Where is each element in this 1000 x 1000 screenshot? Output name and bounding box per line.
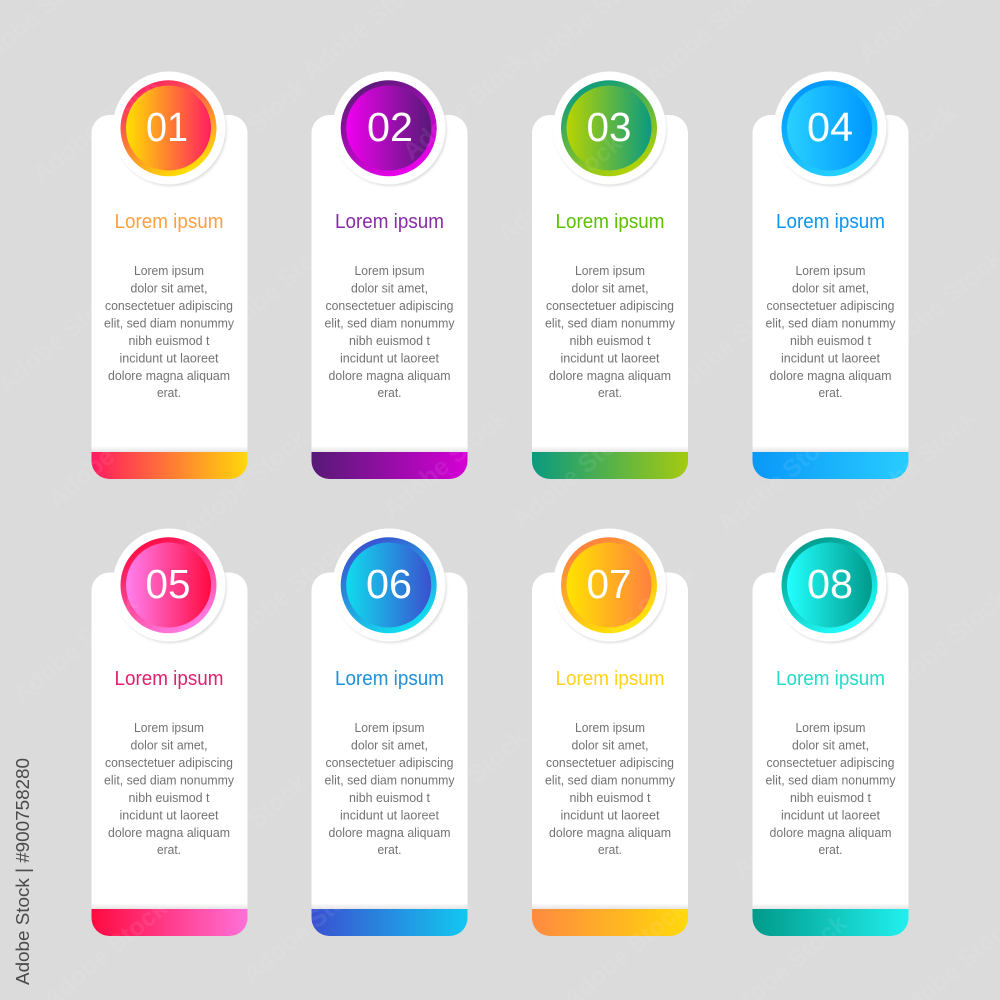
panel: step 04 bbox=[752, 72, 908, 479]
body text bbox=[104, 264, 235, 400]
number: 07 bbox=[586, 561, 632, 607]
stock watermarks: Adobe Stock bbox=[712, 419, 847, 539]
bar shadow bbox=[312, 446, 468, 452]
stock watermarks: Adobe Stock bbox=[177, 769, 312, 889]
badge shadow bbox=[554, 531, 666, 643]
panel: step 03 bbox=[532, 72, 688, 479]
body text: consectetuer adipiscing bbox=[766, 756, 894, 770]
badge ring bbox=[561, 537, 657, 633]
body text: Lorem ipsum bbox=[134, 264, 204, 278]
body text: dolore magna aliquam bbox=[108, 826, 230, 840]
stock watermarks: Adobe Stock bbox=[397, 724, 532, 844]
body text: dolor sit amet, bbox=[572, 738, 648, 752]
badge white disc bbox=[553, 72, 666, 184]
body text: consectetuer adipiscing bbox=[326, 756, 454, 770]
body text: nibh euismod t bbox=[349, 791, 430, 805]
card body bbox=[532, 115, 688, 452]
badge inner disc bbox=[346, 542, 431, 628]
badge shadow bbox=[776, 74, 888, 186]
body text: erat. bbox=[378, 386, 402, 400]
card body bbox=[752, 115, 908, 452]
panel: step 08 bbox=[752, 528, 908, 936]
heading: Lorem ipsum bbox=[556, 211, 664, 233]
badge shadow bbox=[554, 74, 666, 186]
heading: Lorem ipsum bbox=[335, 211, 444, 233]
badge inner disc bbox=[346, 86, 431, 170]
body text: Lorem ipsum bbox=[134, 721, 204, 735]
body text bbox=[545, 264, 676, 400]
body text: incidunt ut laoreet bbox=[120, 808, 219, 822]
badge ring bbox=[782, 80, 878, 176]
stock watermarks: Adobe Stock bbox=[217, 534, 352, 654]
heading: Lorem ipsum bbox=[114, 211, 224, 233]
stock watermarks: Adobe Stock bbox=[507, 414, 642, 534]
body text: incidunt ut laoreet bbox=[781, 808, 880, 822]
stock watermarks: Adobe Stock bbox=[847, 404, 982, 524]
body text: erat. bbox=[378, 843, 402, 857]
badge ring bbox=[120, 537, 216, 633]
body text: incidunt ut laoreet bbox=[560, 351, 660, 365]
badge ring bbox=[561, 80, 657, 176]
body text: Lorem ipsum bbox=[796, 721, 866, 735]
heading: Lorem ipsum bbox=[556, 668, 664, 690]
body text: dolore magna aliquam bbox=[328, 369, 450, 383]
body text: dolore magna aliquam bbox=[328, 826, 450, 840]
number: 03 bbox=[586, 104, 632, 150]
bottom colour bar bbox=[312, 909, 468, 936]
stock watermarks: Adobe Stock bbox=[377, 404, 512, 524]
badge white disc bbox=[112, 72, 226, 184]
body text bbox=[766, 264, 896, 400]
body text bbox=[324, 264, 455, 400]
body text: incidunt ut laoreet bbox=[560, 808, 660, 822]
heading: Lorem ipsum bbox=[776, 668, 885, 690]
body text: dolor sit amet, bbox=[572, 282, 648, 296]
body text: nibh euismod t bbox=[128, 791, 210, 805]
stock watermarks: Adobe Stock bbox=[177, 424, 312, 544]
badge white disc bbox=[774, 528, 886, 642]
body text: Lorem ipsum bbox=[354, 264, 424, 278]
badge inner disc bbox=[566, 542, 652, 628]
stock watermarks: Adobe Stock bbox=[207, 229, 342, 349]
number: 01 bbox=[146, 104, 188, 150]
body text: Lorem ipsum bbox=[575, 264, 645, 278]
body text: incidunt ut laoreet bbox=[120, 351, 219, 365]
body text: nibh euismod t bbox=[790, 791, 871, 805]
stock watermarks: Adobe Stock bbox=[347, 599, 482, 719]
body text bbox=[545, 721, 676, 857]
stock watermarks: Adobe Stock bbox=[727, 764, 862, 884]
badge shadow bbox=[114, 531, 226, 643]
stock watermarks: Adobe Stock bbox=[492, 129, 627, 249]
body text: dolor sit amet, bbox=[351, 282, 428, 296]
card body bbox=[532, 572, 688, 909]
badge inner disc bbox=[787, 86, 872, 170]
stock id label: Adobe Stock | #900758280 bbox=[13, 758, 33, 985]
body text: dolor sit amet, bbox=[130, 738, 208, 752]
stock watermarks: Adobe Stock bbox=[397, 46, 532, 166]
body text: dolore magna aliquam bbox=[549, 369, 671, 383]
body text: dolor sit amet, bbox=[792, 282, 869, 296]
body text bbox=[766, 721, 896, 857]
badge white disc bbox=[774, 72, 886, 184]
bar shadow bbox=[92, 903, 248, 909]
bar shadow bbox=[92, 446, 248, 452]
badge inner disc bbox=[787, 542, 872, 628]
body text: elit, sed diam nonummy bbox=[766, 773, 896, 787]
number: 08 bbox=[807, 561, 853, 607]
card body bbox=[752, 572, 908, 909]
stock watermarks: Adobe Stock bbox=[827, 99, 962, 219]
body text: dolore magna aliquam bbox=[549, 826, 671, 840]
panel: step 05 bbox=[92, 528, 248, 936]
bar shadow bbox=[752, 446, 908, 452]
bottom colour bar bbox=[92, 909, 248, 936]
body text: nibh euismod t bbox=[570, 791, 651, 805]
body text: nibh euismod t bbox=[570, 334, 651, 348]
body text: consectetuer adipiscing bbox=[326, 299, 454, 313]
bar shadow bbox=[532, 903, 688, 909]
body text: elit, sed diam nonummy bbox=[766, 316, 896, 330]
stock watermarks: Adobe Stock bbox=[42, 394, 177, 514]
badge shadow bbox=[334, 531, 446, 643]
body text: elit, sed diam nonummy bbox=[324, 316, 455, 330]
badge shadow bbox=[776, 531, 888, 643]
stock watermarks: Adobe Stock bbox=[7, 589, 142, 709]
body text: nibh euismod t bbox=[128, 334, 210, 348]
body text: Lorem ipsum bbox=[796, 264, 866, 278]
body text: dolor sit amet, bbox=[130, 282, 208, 296]
heading: Lorem ipsum bbox=[335, 668, 444, 690]
badge white disc bbox=[112, 528, 226, 642]
badge inner disc bbox=[126, 86, 211, 170]
body text: elit, sed diam nonummy bbox=[104, 773, 235, 787]
badge ring bbox=[341, 80, 437, 176]
heading: Lorem ipsum bbox=[114, 668, 224, 690]
body text: erat. bbox=[818, 386, 842, 400]
body text: elit, sed diam nonummy bbox=[324, 773, 455, 787]
bar shadow bbox=[532, 446, 688, 452]
stock watermarks: Adobe Stock bbox=[662, 284, 797, 404]
body text: incidunt ut laoreet bbox=[781, 351, 880, 365]
body text: erat. bbox=[598, 386, 622, 400]
number: 05 bbox=[146, 561, 190, 607]
bottom colour bar bbox=[312, 452, 468, 479]
body text: nibh euismod t bbox=[349, 334, 430, 348]
number: 04 bbox=[807, 104, 853, 150]
badge shadow bbox=[334, 74, 446, 186]
panel: step 07 bbox=[532, 528, 688, 936]
badge ring bbox=[341, 537, 437, 633]
bottom colour bar bbox=[752, 452, 908, 479]
body text: incidunt ut laoreet bbox=[340, 351, 439, 365]
body text: consectetuer adipiscing bbox=[766, 299, 894, 313]
body text: elit, sed diam nonummy bbox=[545, 773, 676, 787]
stock watermarks: Adobe Stock bbox=[237, 869, 372, 989]
badge shadow bbox=[114, 74, 226, 186]
heading: Lorem ipsum bbox=[776, 211, 885, 233]
badge white disc bbox=[332, 528, 446, 642]
body text: Lorem ipsum bbox=[575, 721, 645, 735]
number: 02 bbox=[367, 104, 413, 150]
bar shadow bbox=[312, 903, 468, 909]
stock watermarks: Adobe Stock bbox=[177, 74, 312, 194]
card body bbox=[92, 572, 248, 909]
body text: consectetuer adipiscing bbox=[105, 299, 233, 313]
body text: consectetuer adipiscing bbox=[546, 756, 674, 770]
body text: erat. bbox=[818, 843, 842, 857]
bottom colour bar bbox=[92, 452, 248, 479]
bottom colour bar bbox=[532, 452, 688, 479]
card body bbox=[312, 572, 468, 909]
bottom colour bar bbox=[532, 909, 688, 936]
body text: consectetuer adipiscing bbox=[105, 756, 233, 770]
panel: step 01 bbox=[92, 72, 248, 479]
stock watermarks: Adobe Stock bbox=[27, 69, 162, 189]
bar shadow bbox=[752, 903, 908, 909]
stock watermarks: Adobe Stock bbox=[567, 559, 702, 679]
badge inner disc bbox=[126, 542, 211, 628]
body text bbox=[324, 721, 455, 857]
panel: step 06 bbox=[312, 528, 468, 936]
badge white disc bbox=[553, 528, 666, 642]
body text: elit, sed diam nonummy bbox=[545, 316, 676, 330]
body text: consectetuer adipiscing bbox=[546, 299, 674, 313]
badge inner disc bbox=[566, 86, 652, 170]
body text bbox=[104, 721, 235, 857]
body text: dolore magna aliquam bbox=[770, 826, 892, 840]
bottom colour bar bbox=[752, 909, 908, 936]
body text: erat. bbox=[157, 843, 181, 857]
body text: dolore magna aliquam bbox=[108, 369, 230, 383]
body text: dolor sit amet, bbox=[792, 738, 869, 752]
body text: dolor sit amet, bbox=[351, 738, 428, 752]
badge white disc bbox=[332, 72, 446, 184]
body text: erat. bbox=[598, 843, 622, 857]
body text: nibh euismod t bbox=[790, 334, 871, 348]
body text: erat. bbox=[157, 386, 181, 400]
body text: incidunt ut laoreet bbox=[340, 808, 439, 822]
panel: step 02 bbox=[312, 72, 468, 479]
badge ring bbox=[782, 537, 878, 633]
body text: Lorem ipsum bbox=[354, 721, 424, 735]
number: 06 bbox=[366, 561, 412, 607]
body text: elit, sed diam nonummy bbox=[104, 316, 235, 330]
card body bbox=[312, 115, 468, 452]
card body bbox=[92, 115, 248, 452]
badge ring bbox=[120, 80, 216, 176]
body text: dolore magna aliquam bbox=[770, 369, 892, 383]
